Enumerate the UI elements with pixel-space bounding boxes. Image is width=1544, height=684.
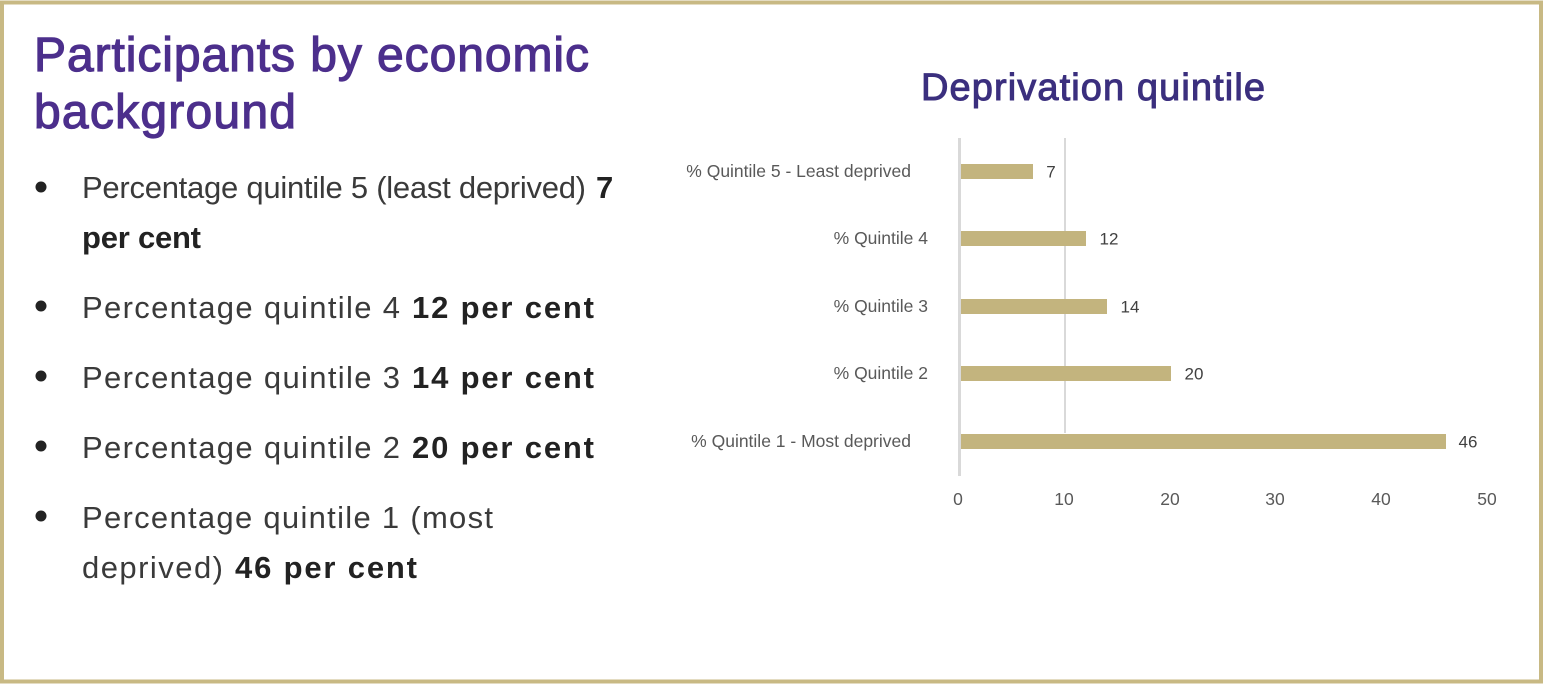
x axis labels: 0 (953, 489, 963, 509)
bar: quintile 2 (834, 363, 1203, 384)
bullet: quintile 1: Percentage quintile 1 (most (82, 500, 493, 535)
chart title: Deprivation quintile (921, 67, 1265, 109)
x axis labels: 10 (1054, 489, 1074, 509)
bar: quintile 1 (691, 431, 1477, 452)
x axis labels: 50 (1477, 489, 1497, 509)
bullet: quintile 2 (36, 430, 594, 465)
x axis labels (953, 489, 1497, 509)
bar: quintile 2: % Quintile 2 (834, 363, 928, 383)
x axis labels: 20 (1160, 489, 1180, 509)
bullet: quintile 2: Percentage quintile 2 (82, 430, 400, 465)
title (34, 29, 589, 139)
bullet: quintile 4 (36, 290, 594, 325)
bullet: quintile 2: 20 per cent (412, 430, 594, 465)
bar: quintile 3: % Quintile 3 (834, 296, 928, 316)
bullet: quintile 5: Percentage quintile 5 (least deprived) (82, 170, 586, 205)
title: background (34, 86, 296, 139)
bar: quintile 3: 14 (1121, 298, 1139, 316)
bar: quintile 1: 46 (1459, 432, 1477, 452)
bullet: quintile 1 (36, 500, 493, 585)
bar: quintile 5: % Quintile 5 - Least deprived (686, 161, 911, 181)
bullet: quintile 3: Percentage quintile 3 (82, 360, 400, 395)
bar chart (686, 138, 1497, 509)
bar: quintile 3 (834, 296, 1139, 316)
bar: quintile 5 (686, 161, 1056, 182)
bar: quintile 4 (834, 228, 1118, 248)
bullet: quintile 4: 12 per cent (412, 290, 594, 325)
bar: quintile 5: 7 (1046, 162, 1056, 182)
bullet: quintile 5: 7 (596, 170, 613, 205)
bar: quintile 1: % Quintile 1 - Most deprived (691, 431, 911, 451)
bullet: quintile 1: 46 per cent (235, 550, 417, 585)
x axis labels: 30 (1265, 489, 1285, 509)
bullet: quintile 5 (36, 170, 613, 255)
bar: quintile 2: 20 (1185, 364, 1203, 384)
title: Participants by economic (34, 29, 589, 82)
bullet: quintile 3 (36, 360, 594, 395)
x axis labels: 40 (1371, 489, 1391, 509)
bullet: quintile 1: deprived) (82, 550, 223, 585)
bar: quintile 4: 12 (1100, 230, 1118, 248)
bullet list (36, 170, 613, 585)
bullet: quintile 4: Percentage quintile 4 (82, 290, 400, 325)
bullet: quintile 3: 14 per cent (412, 360, 594, 395)
bullet: quintile 5: per cent (82, 220, 201, 255)
bar: quintile 4: % Quintile 4 (834, 228, 928, 248)
